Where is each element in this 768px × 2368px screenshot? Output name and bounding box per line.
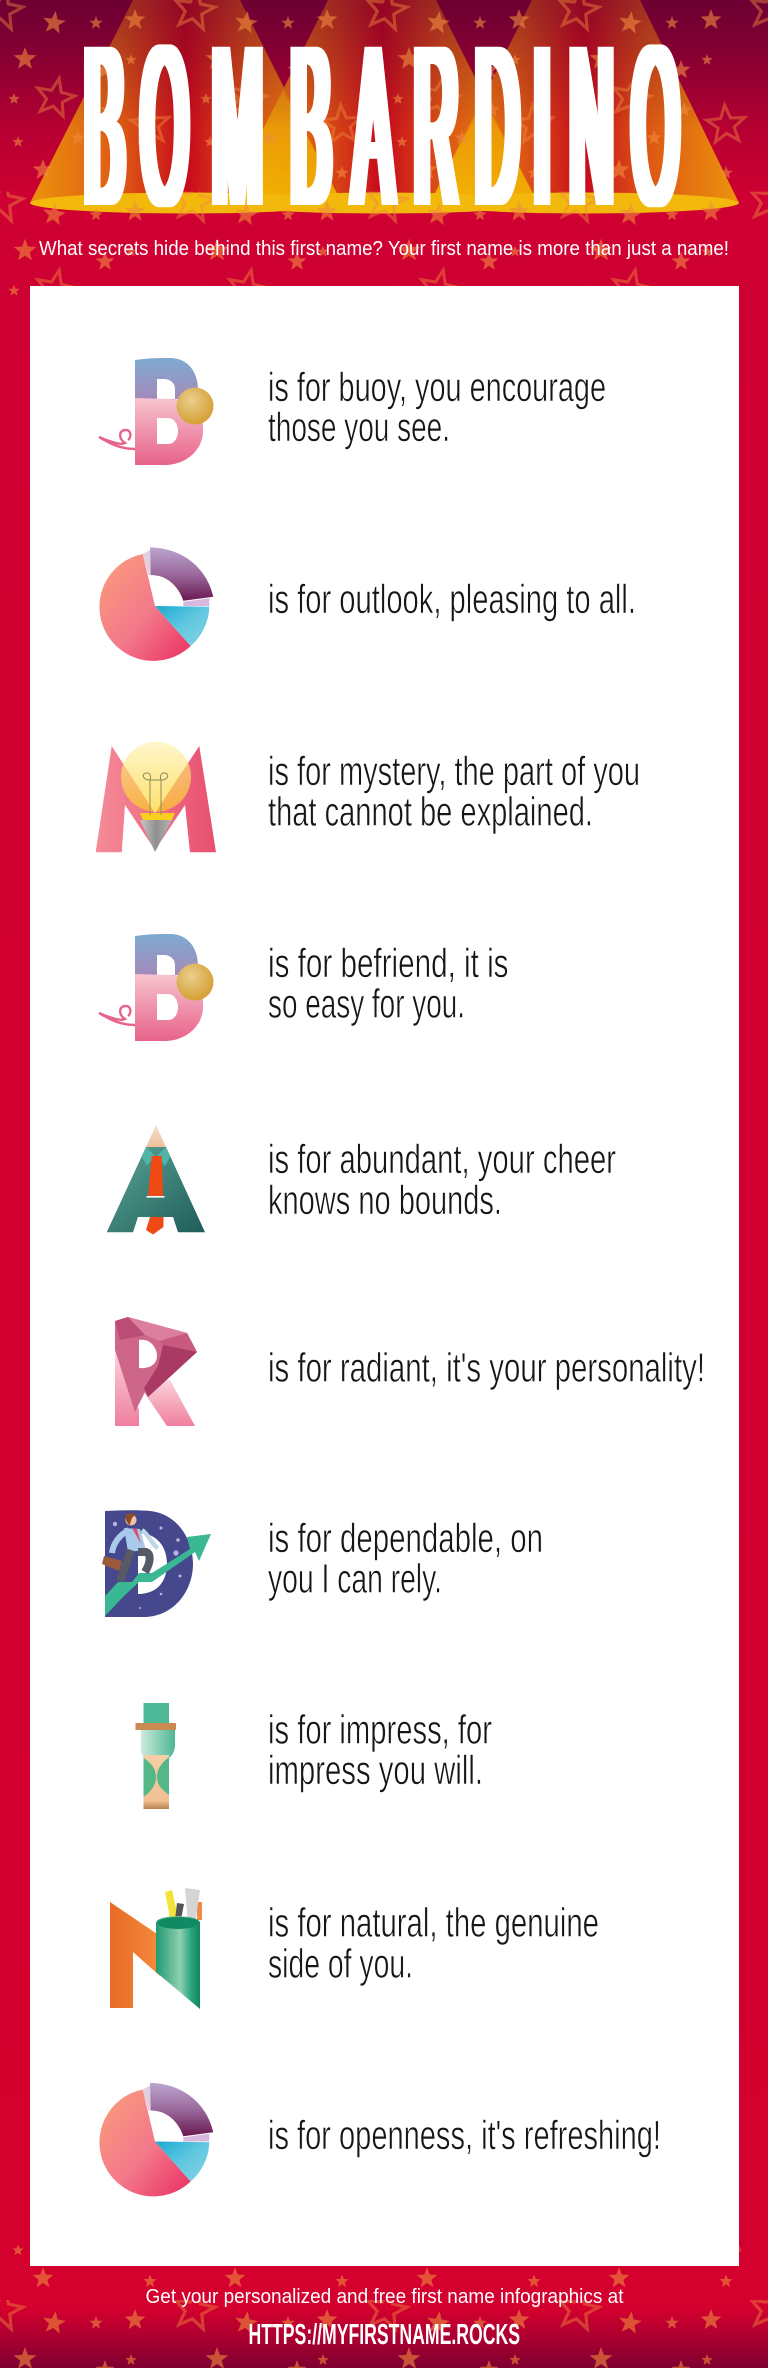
row: R radiant: [115, 1317, 705, 1426]
text: abundant: is for abundant, your cheer: [268, 1136, 616, 1182]
row: D dependable: [102, 1510, 543, 1617]
icon: letter I hourglass: [136, 1703, 176, 1809]
star pattern top: [0, 0, 768, 306]
icon: letter R with gem: [115, 1317, 197, 1426]
text: impress: impress you will.: [268, 1747, 483, 1793]
text: abundant: [268, 1136, 616, 1223]
row: N natural: [110, 1888, 599, 2009]
text: natural: [268, 1900, 599, 1986]
text: befriend: so easy for you.: [268, 980, 465, 1026]
row: I impress: [136, 1703, 492, 1809]
row: M mystery: [96, 742, 640, 852]
text: mystery: [268, 748, 640, 834]
icon: letter N with pen holder: [110, 1888, 202, 2009]
icon: letter B with piggy bank: [99, 934, 214, 1041]
title: BOMBARDINO: [85, 0, 679, 254]
icon: letter D with climbing man: [102, 1510, 211, 1617]
text: befriend: [268, 940, 508, 1026]
text: buoy: those you see.: [268, 404, 450, 450]
row: A abundant: [107, 1125, 616, 1234]
text: buoy: [268, 364, 606, 450]
text: natural: is for natural, the genuine: [268, 1900, 599, 1946]
text: befriend: is for befriend, it is: [268, 940, 508, 986]
text: abundant: knows no bounds.: [268, 1177, 502, 1223]
text: dependable: is for dependable, on: [268, 1515, 543, 1561]
text: mystery: that cannot be explained.: [268, 788, 593, 834]
text: impress: is for impress, for: [268, 1706, 492, 1752]
text: natural: side of you.: [268, 1940, 413, 1986]
spotlights: [0, 0, 768, 214]
panel: letters: [30, 286, 739, 2266]
star pattern bottom: [0, 2240, 768, 2368]
row: O outlook: [99, 548, 636, 661]
text: dependable: [268, 1515, 543, 1602]
footer link: HTTPS://MYFIRSTNAME.ROCKS: [248, 2319, 520, 2351]
icon: letter M with light bulb: [96, 742, 216, 852]
text: impress: [268, 1706, 492, 1793]
text: dependable: you I can rely.: [268, 1556, 442, 1602]
row: O openness: [99, 2083, 661, 2196]
footer text: Get your personalized and free first name infographics at: [146, 2285, 624, 2308]
icon: letter B with piggy bank: [99, 358, 214, 465]
icon: letter O pie chart: [99, 2083, 213, 2196]
text: buoy: is for buoy, you encourage: [268, 364, 606, 410]
row: B befriend: [99, 934, 508, 1041]
icon: letter A with tie: [107, 1125, 205, 1234]
icon: letter O pie chart: [99, 548, 213, 661]
row: B buoy: [99, 358, 606, 465]
